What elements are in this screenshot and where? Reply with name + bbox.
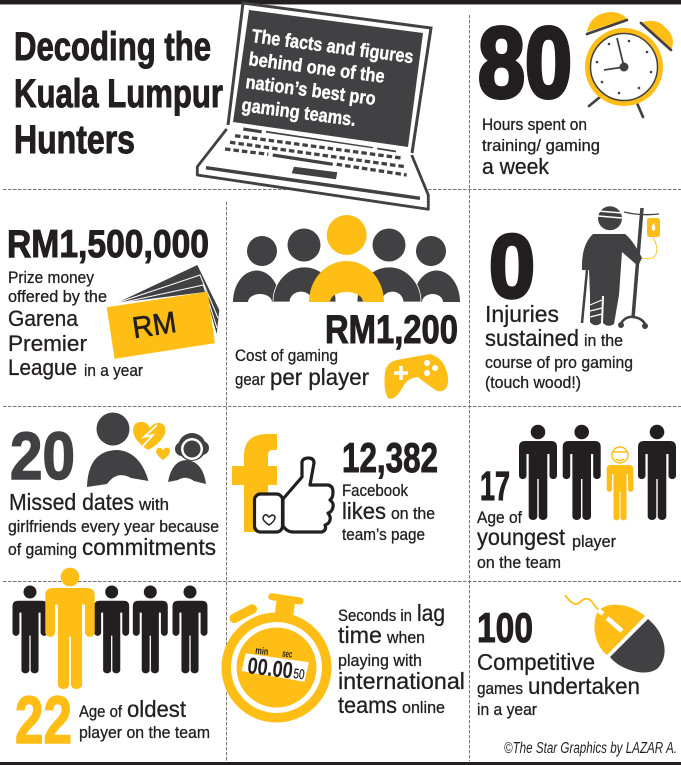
stat: 80 number: 80 <box>478 7 572 119</box>
text: lag time: time <box>338 622 382 648</box>
text: cost of gaming gear <box>235 347 369 390</box>
text: lag time: lag <box>417 600 445 626</box>
title: Decoding the <box>14 25 211 69</box>
text: missed dates <box>8 489 219 560</box>
text: competitive games: in a year <box>477 700 537 719</box>
laptop base <box>197 129 428 209</box>
text: prize money: offered by the <box>8 288 107 306</box>
text: prize money: in a year <box>84 362 143 380</box>
text: lag time: international <box>338 668 465 694</box>
text: cost of gaming gear: per player <box>270 364 369 390</box>
text: injuries <box>485 301 633 392</box>
icon: couple with broken heart <box>87 412 209 487</box>
text: youngest player: on the team <box>477 554 561 572</box>
text: prize money: League <box>8 355 77 380</box>
text: cost of gaming gear: Cost of gaming <box>235 347 338 365</box>
text: facebook likes: team’s page <box>342 526 425 544</box>
title: Kuala Lumpur <box>14 72 223 116</box>
icon: stopwatch: 50 <box>293 665 306 682</box>
text: youngest player <box>477 509 616 572</box>
icon: team with oldest player <box>13 568 207 689</box>
text: facebook likes: Facebook <box>342 482 409 500</box>
text: injuries: course of pro gaming <box>485 354 633 372</box>
stat: 100: 100 <box>477 604 533 651</box>
text: prize money: Prize money <box>8 269 95 287</box>
text: facebook likes: on the <box>391 505 435 523</box>
intro text: gaming teams. <box>240 95 357 131</box>
intro text: The facts and figures <box>250 26 415 68</box>
stat: RM1,200: RM1,200 <box>325 308 458 352</box>
text: oldest player: oldest <box>127 696 186 722</box>
text: lag time: Seconds in <box>338 607 412 625</box>
text: injuries: Injuries <box>485 301 559 327</box>
text: youngest player: youngest <box>477 524 565 550</box>
text: oldest player: player on the team <box>79 723 210 742</box>
stat: 17: 17 <box>480 463 510 509</box>
title: Hunters <box>14 118 135 162</box>
intro text: nation’s best pro <box>244 72 377 110</box>
text: injuries: sustained <box>485 325 579 351</box>
text: competitive games: Competitive <box>477 649 595 675</box>
text: lag time: playing with <box>338 652 422 670</box>
icon: injured player with drip <box>582 206 660 329</box>
text: prize money: Garena <box>8 306 79 331</box>
icon: group of players <box>233 215 460 302</box>
text: prize money <box>8 269 143 380</box>
stat: 12,382: 12,382 <box>342 434 438 481</box>
text: lag time: when <box>386 629 425 647</box>
text: hours spent: training/ gaming <box>482 137 600 155</box>
text: facebook likes: likes <box>342 498 386 524</box>
icon: team with youngest player <box>519 425 676 520</box>
intro text: behind one of the <box>247 49 386 88</box>
text: oldest player <box>79 696 210 742</box>
stat: 22: 22 <box>15 683 72 758</box>
text: youngest player: player <box>572 533 616 551</box>
icon: alarm clock <box>585 12 673 117</box>
text: facebook likes <box>342 482 435 544</box>
icon: laptop with intro text <box>197 3 431 209</box>
text: hours spent <box>482 116 600 179</box>
text: missed dates: Missed dates <box>9 489 134 515</box>
icon: computer mouse <box>565 595 665 672</box>
text: cost of gaming gear: gear <box>235 371 265 389</box>
icon: stopwatch: min <box>255 646 269 658</box>
stat: RM1,500,000: RM1,500,000 <box>7 223 209 266</box>
text: prize money: Premier <box>8 331 87 356</box>
icon: stopwatch: 00.00 <box>246 652 294 684</box>
text: lag time: online <box>402 699 445 717</box>
text: competitive games <box>477 649 640 719</box>
stat: 20: 20 <box>10 419 75 494</box>
text: missed dates: of gaming <box>8 541 77 559</box>
icon: game controller <box>384 354 448 399</box>
text: missed dates: girlfriends every year because <box>8 518 219 536</box>
text: injuries: (touch wood!) <box>485 374 581 392</box>
intro text <box>240 26 415 131</box>
text: missed dates: with <box>138 496 169 514</box>
text: competitive games: games <box>477 680 523 698</box>
text: lag time <box>338 600 465 718</box>
laptop screen <box>228 3 431 153</box>
icon: banknotes: RM <box>130 306 179 345</box>
text: competitive games: undertaken <box>528 673 640 699</box>
icon: stopwatch: sec <box>282 649 293 661</box>
text: injuries: in the <box>584 332 623 350</box>
icon: banknotes <box>107 265 219 358</box>
text: oldest player: Age of <box>79 703 122 721</box>
icon: stopwatch <box>222 597 332 722</box>
text: lag time: teams <box>338 692 397 718</box>
stat: 0: 0 <box>489 217 535 317</box>
text: missed dates: commitments <box>82 534 216 560</box>
title <box>14 25 223 162</box>
text: hours spent: Hours spent on <box>482 116 587 134</box>
icon: facebook thumbs up <box>232 434 333 532</box>
text: youngest player: Age of <box>477 509 522 527</box>
text: hours spent: a week <box>482 154 550 179</box>
